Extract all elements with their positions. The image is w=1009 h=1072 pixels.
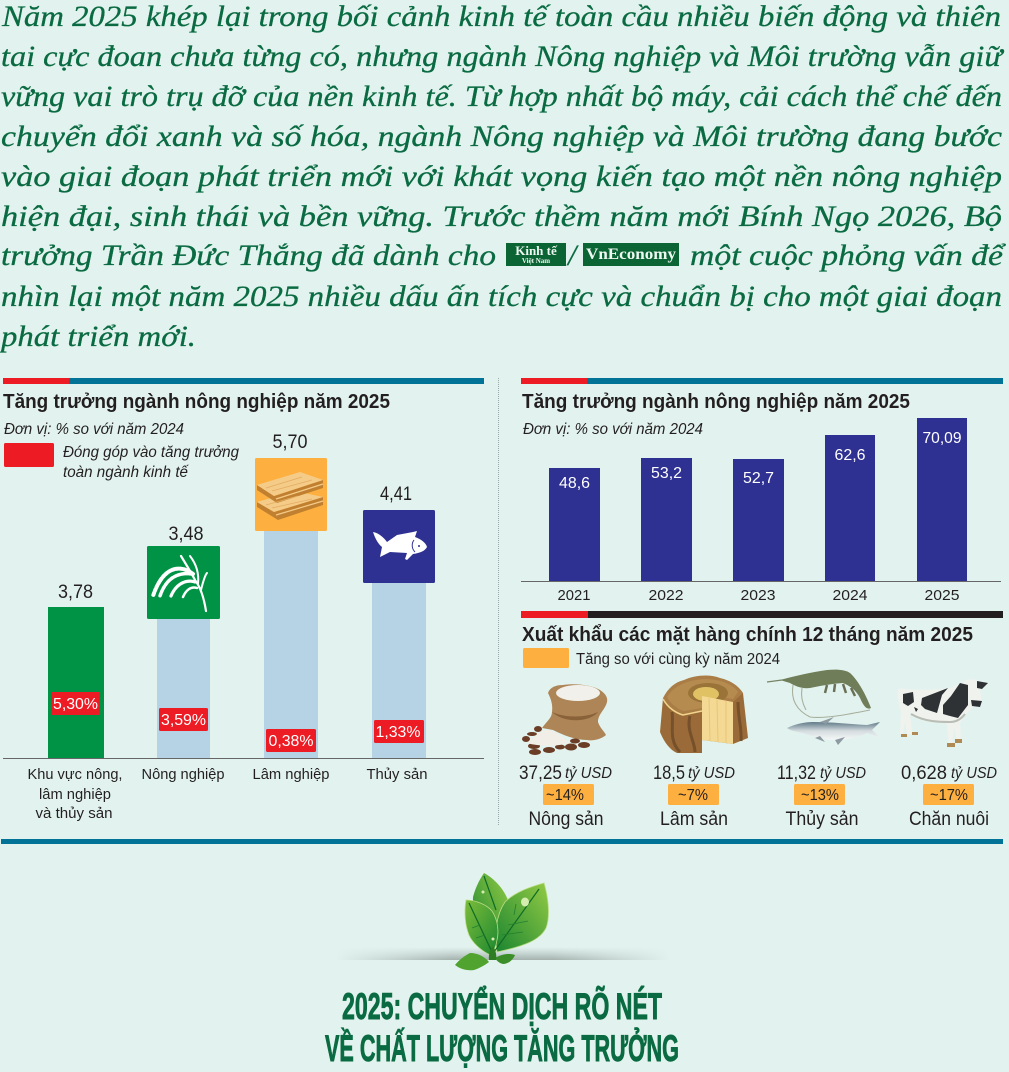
bar: 2022 xyxy=(641,458,692,604)
category labels xyxy=(28,766,428,822)
bar: 2021 xyxy=(549,468,600,604)
panel: sector growth chart xyxy=(3,378,484,822)
stat: livestock: 0,628 xyxy=(901,762,947,784)
column divider xyxy=(498,378,500,825)
bar: agriculture, forestry and fisheries: 5,30% xyxy=(53,696,98,713)
bar: 2024: 2024 xyxy=(832,587,868,604)
bar: agriculture: 3,59% xyxy=(161,712,206,729)
stat: forest products xyxy=(653,762,735,830)
section rule xyxy=(1,839,1003,844)
icon: fish xyxy=(373,531,427,560)
logo: VnEconomy xyxy=(583,243,679,266)
intro paragraph: tai cực đoan chưa từng có, nhưng ngành Nông nghiệp và Môi trường vẫn giữ xyxy=(1,40,1005,73)
stat: seafood: Thủy sản xyxy=(786,809,858,830)
bar: 2023 xyxy=(733,459,784,604)
category labels: Khu vực nông, xyxy=(28,766,122,783)
stat: seafood: 11,32 xyxy=(777,762,816,784)
stat: seafood xyxy=(777,762,866,830)
intro paragraph: hiện đại, sinh thái và bền vững. Trước thềm năm mới Bính Ngọ 2026, Bộ xyxy=(1,200,1002,233)
bar: agriculture xyxy=(147,524,220,758)
icon: wood planks xyxy=(257,472,323,520)
legend: increase xyxy=(523,648,780,668)
intro paragraph: trưởng Trần Đức Thắng đã dành cho xyxy=(1,239,496,272)
bar: forestry: 5,70 xyxy=(272,432,308,453)
bar: 2022: 53,2 xyxy=(651,465,682,482)
intro paragraph: phát triển mới. xyxy=(0,320,196,353)
intro paragraph: / xyxy=(566,239,579,272)
title xyxy=(325,985,679,1069)
stat: forest products: Lâm sản xyxy=(660,809,728,830)
legend: contribution xyxy=(4,443,239,481)
icon: rice stalk xyxy=(153,556,207,611)
bar: 2025: 2025 xyxy=(924,587,960,604)
stat: agricultural products: 37,25 xyxy=(519,762,562,784)
intro paragraph: Năm 2025 khép lại trong bối cảnh kinh tế toàn cầu nhiều biến động và thiên xyxy=(1,0,1001,33)
stat: seafood: tỷ USD xyxy=(820,765,866,782)
stat: forest products: tỷ USD xyxy=(688,765,735,782)
logo: Kinh tế Việt Nam: Kinh tế xyxy=(515,243,558,258)
stat: livestock: tỷ USD xyxy=(951,765,997,782)
panel: exports xyxy=(519,611,1003,830)
logo: VnEconomy: VnEconomy xyxy=(586,246,676,263)
icon: shrimp and fish xyxy=(767,670,881,745)
intro paragraph: nhìn lại một năm 2025 nhiều dấu ấn tích cực và chuẩn bị cho một giai đoạn xyxy=(1,280,1002,313)
unit note: Đơn vị: % so với năm 2024 xyxy=(523,421,703,438)
category labels: lâm nghiệp xyxy=(39,786,111,803)
heading: yearly growth: Tăng trưởng ngành nông nghiệp năm 2025 xyxy=(522,391,910,413)
stat: forest products: 18,5 xyxy=(653,762,685,784)
intro paragraph xyxy=(0,0,1006,353)
panel top rule xyxy=(3,378,484,384)
bar: 2024 xyxy=(825,435,875,604)
bar: 2024: 62,6 xyxy=(834,447,866,464)
icon: rice sack xyxy=(522,684,607,755)
stat: livestock xyxy=(901,762,997,830)
stat: seafood: ~13% xyxy=(801,787,839,804)
bar: 2022: 2022 xyxy=(648,587,684,604)
logo: Kinh tế Việt Nam: Việt Nam xyxy=(522,257,550,265)
title: 2025: CHUYỂN DỊCH RÕ NÉT xyxy=(342,985,662,1027)
intro paragraph: vững vai trò trụ đỡ của nền kinh tế. Từ hợp nhất bộ máy, cải cách thể chế đến xyxy=(1,80,1002,113)
panel top rule xyxy=(521,378,1003,384)
bar: 2021: 48,6 xyxy=(559,475,590,492)
baseline xyxy=(3,758,484,759)
stat: agricultural products xyxy=(519,762,612,830)
bar: 2025: 70,09 xyxy=(922,430,962,447)
baseline xyxy=(521,581,1001,582)
stat: livestock: ~17% xyxy=(930,787,968,804)
bar: forestry xyxy=(255,432,327,758)
category labels: và thủy sản xyxy=(36,805,113,822)
stat: agricultural products: Nông sản xyxy=(528,809,604,830)
bar: forestry: 0,38% xyxy=(268,733,314,750)
heading: exports: Xuất khẩu các mặt hàng chính 12 tháng năm 2025 xyxy=(522,624,973,646)
bar: agriculture, forestry and fisheries: 3,78 xyxy=(58,582,93,603)
icon: green leaves xyxy=(335,873,670,970)
icon: timber stump xyxy=(660,676,748,753)
intro paragraph: một cuộc phỏng vấn để xyxy=(690,239,1006,272)
intro paragraph: chuyển đổi xanh và số hóa, ngành Nông nghiệp và Môi trường đang bước xyxy=(1,120,1002,153)
panel: yearly growth chart xyxy=(521,378,1003,604)
icon: dairy cow xyxy=(898,679,988,747)
bar: 2023: 52,7 xyxy=(743,470,774,487)
stat: livestock: Chăn nuôi xyxy=(909,809,989,830)
legend: contribution: Đóng góp vào tăng trưởng xyxy=(63,444,239,461)
bar: agriculture, forestry and fisheries xyxy=(48,582,104,758)
bar: 2025 xyxy=(917,418,967,604)
bar: fisheries xyxy=(363,484,435,758)
bar: fisheries: 1,33% xyxy=(376,724,421,741)
intro paragraph: vào giai đoạn phát triển mới với khát vọng kiến tạo một nền nông nghiệp xyxy=(1,160,1002,193)
stat: agricultural products: ~14% xyxy=(546,787,584,804)
bar: agriculture: 3,48 xyxy=(168,524,204,545)
bar: 2023: 2023 xyxy=(740,587,776,604)
legend: contribution: toàn ngành kinh tế xyxy=(63,464,189,481)
title: VỀ CHẤT LƯỢNG TĂNG TRƯỞNG xyxy=(325,1027,679,1069)
panel top rule xyxy=(521,611,1003,618)
category labels: Lâm nghiệp xyxy=(252,766,330,783)
bar: fisheries: 4,41 xyxy=(380,484,412,505)
category labels: Thủy sản xyxy=(366,766,428,783)
stat: forest products: ~7% xyxy=(678,787,708,804)
unit note: Đơn vị: % so với năm 2024 xyxy=(4,421,184,438)
heading: sector growth: Tăng trưởng ngành nông nghiệp năm 2025 xyxy=(3,391,390,413)
bar: 2021: 2021 xyxy=(558,587,590,604)
category labels: Nông nghiệp xyxy=(142,766,224,783)
logo: Kinh tế Việt Nam xyxy=(506,243,566,266)
legend: increase: Tăng so với cùng kỳ năm 2024 xyxy=(576,651,780,668)
stat: agricultural products: tỷ USD xyxy=(565,765,612,782)
